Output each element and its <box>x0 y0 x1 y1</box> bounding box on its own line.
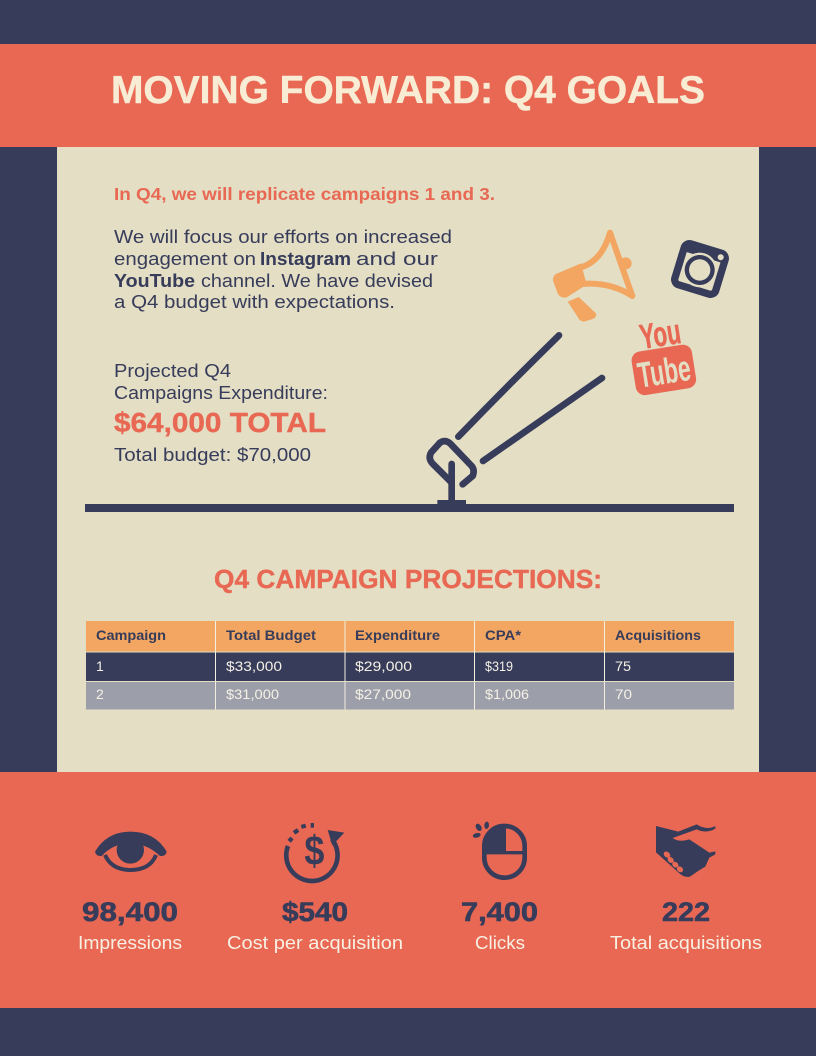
stat: total acquisitions: 222 <box>662 897 710 927</box>
table row 2: 70 <box>615 686 632 702</box>
table header row: Acquisitions <box>615 628 701 643</box>
stat: cost per acquisition: Cost per acquisition <box>227 933 403 953</box>
panel: cream content area <box>57 147 759 772</box>
ground line <box>85 504 734 512</box>
intro paragraph: engagement on <box>114 249 256 269</box>
stat: total acquisitions <box>610 897 762 953</box>
projected expenditure block: $64,000 TOTAL <box>114 407 326 438</box>
table row 2: $1,006 <box>485 686 529 702</box>
table header row: CPA* <box>485 628 522 643</box>
stat: cost per acquisition: $540 <box>282 897 348 927</box>
panel: stats band <box>0 772 816 1008</box>
icon: youtube logo <box>625 311 697 396</box>
icon: youtube logo: Tube <box>635 347 693 396</box>
header banner <box>0 44 816 147</box>
stat: clicks: 7,400 <box>461 897 538 927</box>
icon: eye <box>95 832 167 870</box>
stat: clicks <box>461 897 538 953</box>
projected expenditure block <box>114 361 328 465</box>
icon: lever with signal beams <box>430 335 602 505</box>
icon: megaphone <box>553 233 632 322</box>
icon: dollar cycle: $ <box>304 827 324 874</box>
table row 2: $31,000 <box>226 686 279 702</box>
table row 1: 1 <box>96 658 104 674</box>
table row 2: $27,000 <box>355 686 411 702</box>
intro paragraph <box>114 227 452 312</box>
table row 1 <box>96 658 631 674</box>
intro paragraph: and our <box>356 249 438 269</box>
stat: impressions: 98,400 <box>82 897 178 927</box>
table header row: Total Budget <box>226 628 317 643</box>
table heading: Q4 CAMPAIGN PROJECTIONS: <box>214 564 602 594</box>
icon: mouse <box>472 821 525 878</box>
projected expenditure block: Total budget: $70,000 <box>114 445 311 465</box>
table header row: Campaign <box>96 628 166 643</box>
table row 1: $29,000 <box>355 658 412 674</box>
stat: total acquisitions: Total acquisitions <box>610 933 762 953</box>
icon: handshake <box>656 824 715 877</box>
title: MOVING FORWARD: Q4 GOALS <box>111 69 705 112</box>
table row 1: 75 <box>615 658 631 674</box>
intro paragraph: a Q4 budget with expectations. <box>114 292 395 312</box>
table row 1: $33,000 <box>226 658 282 674</box>
intro paragraph: channel. We have devised <box>201 271 433 291</box>
icon: instagram <box>672 240 728 296</box>
table: campaign projections <box>86 621 734 710</box>
stat: clicks: Clicks <box>475 933 525 953</box>
intro paragraph: We will focus our efforts on increased <box>114 227 452 247</box>
stat: impressions: Impressions <box>78 933 182 953</box>
table row 1: $319 <box>485 659 513 674</box>
table row 2: 2 <box>96 686 104 702</box>
stat: impressions <box>78 897 182 953</box>
icon: youtube logo: You <box>637 312 684 357</box>
projected expenditure block: Projected Q4 <box>114 361 231 381</box>
stat: cost per acquisition <box>227 897 403 953</box>
intro heading: In Q4, we will replicate campaigns 1 and 3. <box>114 184 495 204</box>
table header row: Expenditure <box>355 628 441 643</box>
icon: dollar cycle <box>286 823 344 881</box>
intro paragraph: YouTube <box>114 271 195 291</box>
table header row <box>96 628 701 643</box>
intro paragraph: Instagram <box>260 249 351 269</box>
table row 2 <box>96 686 632 702</box>
projected expenditure block: Campaigns Expenditure: <box>114 383 328 403</box>
